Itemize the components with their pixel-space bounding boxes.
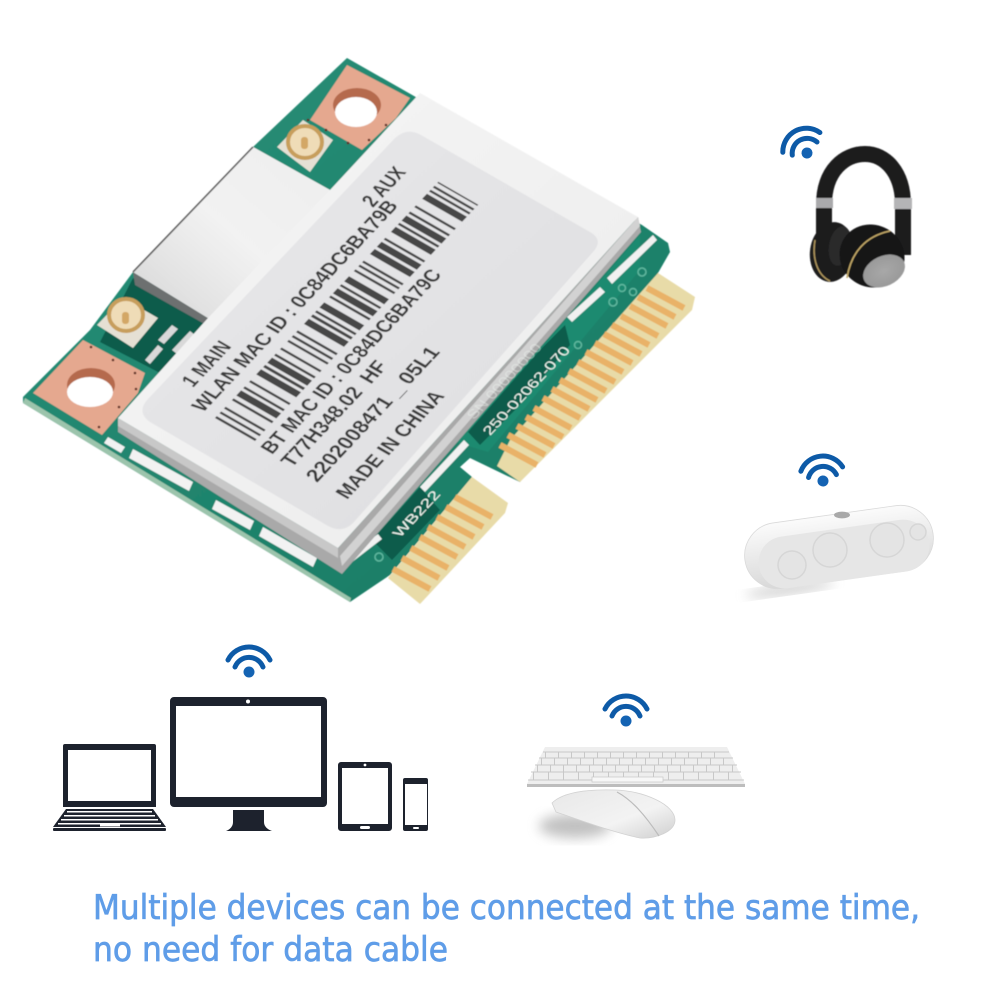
shield bracket edge <box>133 147 253 272</box>
mouse <box>552 790 675 838</box>
circuit traces beside the connector <box>455 235 640 452</box>
metal shield <box>118 93 638 548</box>
icon: wifi <box>228 647 270 678</box>
text: WB222: WB222 <box>389 488 444 539</box>
keyboard bottom edge <box>527 784 745 787</box>
left silver band <box>816 198 833 208</box>
caption line 2: no need for data cable <box>93 930 448 970</box>
headphones with wifi <box>777 121 916 299</box>
tablet <box>338 762 392 831</box>
antenna connector ring left <box>109 299 143 331</box>
monitor <box>170 697 327 831</box>
laptop keys <box>58 811 161 826</box>
left ear pad <box>826 224 854 268</box>
label text <box>177 163 450 502</box>
circuit board <box>23 58 670 602</box>
dark green area near board text <box>468 325 570 445</box>
text: BT MAC ID: BT MAC ID : 0C84DC6BA79C <box>256 266 447 457</box>
caption <box>93 888 920 970</box>
antenna connector pin top <box>301 137 308 149</box>
small components <box>145 325 195 364</box>
shield bracket <box>133 147 330 318</box>
dark green area near short connector <box>372 487 440 560</box>
right ear cup silver disc <box>858 248 910 294</box>
mouse scroll line <box>617 792 659 836</box>
phone button <box>413 827 419 829</box>
wireless card <box>23 58 695 604</box>
copper mounting pad left <box>33 340 145 435</box>
short connector gold fingers <box>393 497 492 589</box>
left ear cup gold trim <box>814 240 830 281</box>
antenna connector base top <box>277 120 333 172</box>
text: model number: T77H348.02 HF <box>276 357 393 470</box>
silver contact pads, bottom side <box>104 437 317 567</box>
monitor stand <box>226 810 272 831</box>
text: made in china: MADE IN CHINA <box>331 387 450 502</box>
right silver band <box>894 198 912 209</box>
shield bottom highlight <box>118 418 338 558</box>
icon: wifi <box>800 454 844 489</box>
text: WLAN MAC ID: WLAN MAC ID : 0C84DC6BA79B <box>187 197 403 415</box>
hole center top <box>335 97 377 127</box>
caption line 1: Multiple devices can be connected at the same time, <box>93 888 920 928</box>
copper pad drill dots top <box>307 119 387 144</box>
dark component area <box>100 278 208 373</box>
monitor frame <box>170 697 327 807</box>
tablet buttons <box>360 764 370 829</box>
laptop lid <box>63 744 156 807</box>
tablet frame <box>338 762 392 831</box>
shield side highlight <box>340 217 640 566</box>
gold connector substrate, long <box>497 273 695 482</box>
mounting hole recess top <box>333 88 381 122</box>
phone <box>403 778 428 831</box>
right ear cup gold trim <box>847 231 890 278</box>
laptop <box>53 744 166 831</box>
shield bracket underside <box>133 272 208 326</box>
silver contact pads, right side <box>343 235 657 566</box>
headphones illustration <box>806 154 916 299</box>
copper mounting pad top <box>310 65 410 150</box>
printed label <box>142 132 598 529</box>
copper pad drill dots left <box>90 346 137 428</box>
text: serial number: 2202008471 _ 05L1 <box>301 343 445 485</box>
speaker shadow <box>745 579 835 599</box>
speaker grille <box>755 516 933 592</box>
long connector gold fingers <box>500 288 684 465</box>
icon: wifi <box>605 696 647 726</box>
antenna connector ring top <box>288 126 322 158</box>
keyboard and mouse with wifi <box>527 696 745 838</box>
speaker body <box>740 501 938 593</box>
laptop base <box>53 809 166 827</box>
gold connector substrate, short <box>388 477 508 604</box>
text: faint part number: SN 00000000 <box>463 341 545 421</box>
mounting hole recess left <box>67 368 115 402</box>
mouse shadow <box>539 814 611 838</box>
speaker with wifi <box>740 454 938 599</box>
antenna connector pin left <box>122 312 129 324</box>
phone frame <box>403 778 428 831</box>
shield side wall <box>118 217 641 574</box>
text: 2 AUX: 2 AUX <box>357 163 411 210</box>
left ear cup <box>806 219 858 285</box>
antenna connector base left <box>97 298 158 348</box>
hole center left <box>67 377 113 407</box>
text: 1 MAIN: 1 MAIN <box>177 338 237 390</box>
keyboard key rows <box>528 752 744 780</box>
computers with wifi <box>53 647 428 831</box>
right ear cup <box>828 213 916 299</box>
icon: wifi <box>777 121 828 168</box>
speaker logo <box>834 512 850 518</box>
board silkscreen text <box>389 341 574 539</box>
text: part number: 250-02062-070 <box>479 344 574 437</box>
keyboard body <box>527 747 745 787</box>
board edge <box>23 398 351 602</box>
barcode <box>235 193 458 430</box>
laptop front lip <box>53 828 166 831</box>
speaker driver rings <box>778 523 926 579</box>
monitor camera <box>246 700 250 704</box>
headband <box>824 154 903 255</box>
keyboard spacebar <box>592 777 663 782</box>
via holes <box>375 268 646 561</box>
